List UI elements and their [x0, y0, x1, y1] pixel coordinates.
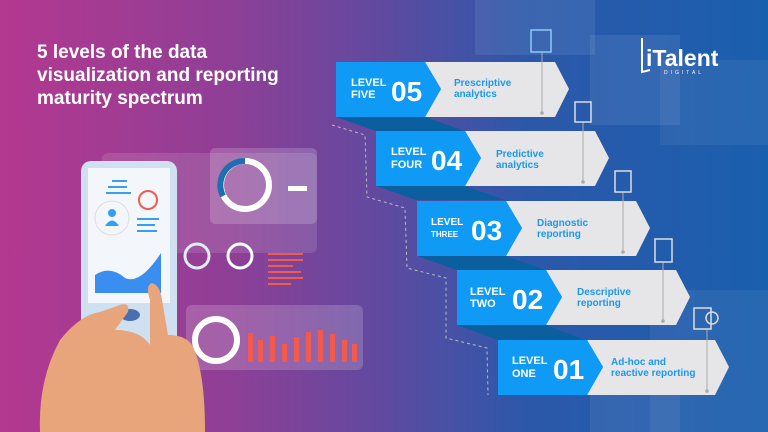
logo: DIGITAL: [664, 70, 704, 76]
level 2: reporting: [577, 298, 621, 309]
logo: iTalent: [646, 45, 719, 71]
dashed connector: [332, 125, 488, 395]
level 3: reporting: [537, 229, 581, 240]
level 1: LEVEL: [512, 355, 548, 367]
level 1: [498, 308, 729, 395]
level 3: LEVEL: [431, 217, 463, 228]
level 2: [457, 239, 690, 340]
title: 5 levels of the data: [37, 42, 207, 63]
level 4: [376, 102, 609, 200]
level 2: Descriptive: [577, 287, 631, 298]
level 1: reactive reporting: [611, 368, 695, 379]
level 5: LEVEL: [351, 77, 387, 89]
level 2: 02: [512, 284, 543, 315]
level 3: THREE: [431, 230, 459, 239]
level 4: Predictive: [496, 149, 544, 160]
illustration: phone and hands: [40, 161, 205, 432]
level 1: 01: [553, 354, 584, 385]
level 1: ONE: [512, 368, 536, 380]
level 4: FOUR: [391, 159, 422, 171]
title: visualization and reporting: [37, 65, 279, 86]
title: [37, 42, 279, 109]
level 5: analytics: [454, 89, 497, 100]
level 4: analytics: [496, 160, 539, 171]
logo: [642, 38, 719, 76]
level 2: LEVEL: [470, 286, 506, 298]
level 3: [417, 171, 650, 270]
level 5: [336, 30, 569, 131]
level 4: 04: [431, 145, 463, 176]
level 5: FIVE: [351, 89, 375, 101]
illustration: dashboards: [102, 148, 363, 370]
level 3: Diagnostic: [537, 218, 589, 229]
title: maturity spectrum: [37, 88, 203, 109]
level 3: 03: [471, 215, 502, 246]
level 4: LEVEL: [391, 146, 427, 158]
level 5: Prescriptive: [454, 78, 512, 89]
level 5: 05: [391, 76, 422, 107]
level 1: Ad-hoc and: [611, 357, 666, 368]
level 2: TWO: [470, 298, 496, 310]
